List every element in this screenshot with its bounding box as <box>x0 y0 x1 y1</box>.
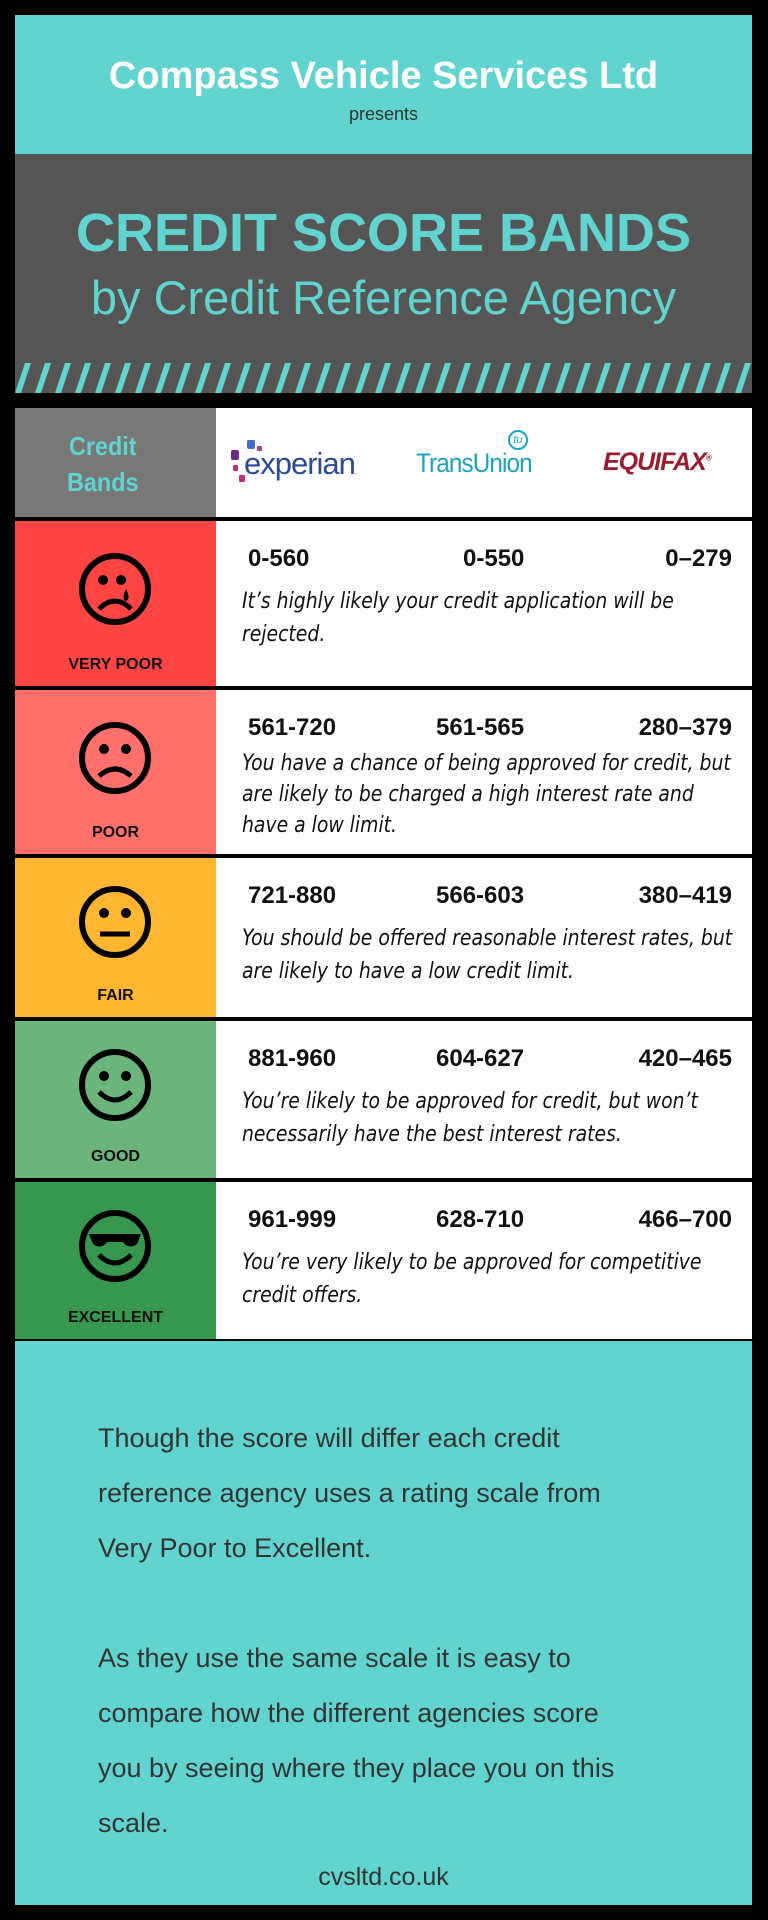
row: very poor: 0-550 <box>463 545 524 572</box>
logo: experian: experian. <box>244 446 356 481</box>
row: excellent: 466–700 <box>639 1206 732 1233</box>
row: good: 420–465 <box>639 1045 732 1072</box>
row: excellent <box>15 1182 752 1339</box>
table header row <box>15 408 752 517</box>
row: good: 604-627 <box>436 1045 524 1072</box>
summary text: As they use the same scale it is easy to compare how the different agencies score you by seeing where they place you on this scale. <box>98 1643 614 1838</box>
title panel: by Credit Reference Agency <box>91 271 676 324</box>
icon: crying face <box>79 553 151 625</box>
bottom panel: summary <box>15 1341 752 1905</box>
row: fair: 566-603 <box>436 882 524 909</box>
row: poor: POOR <box>92 824 139 841</box>
logo: transunion <box>416 430 532 478</box>
row: poor: 280–379 <box>639 714 732 741</box>
icon: sad face <box>79 722 151 794</box>
row: excellent: 628-710 <box>436 1206 524 1233</box>
row: poor <box>15 690 752 854</box>
logo: equifax: EQUIFAX® <box>603 448 711 476</box>
row: good: GOOD <box>91 1148 140 1165</box>
row: fair <box>15 858 752 1017</box>
icon: smiling face <box>79 1049 151 1121</box>
row: very poor <box>15 521 752 686</box>
header: company: presents <box>349 104 418 124</box>
row: poor: 561-565 <box>436 714 524 741</box>
heading: credit bands <box>67 431 139 497</box>
row: poor: 561-720 <box>248 714 336 741</box>
row: fair: 721-880 <box>248 882 336 909</box>
row: excellent: EXCELLENT <box>68 1309 163 1326</box>
row: good: You’re likely to be approved for credit, but won’t necessarily have the best interest rates. <box>242 1089 698 1147</box>
header: company: Compass Vehicle Services Ltd <box>109 55 658 97</box>
footer url: cvsltd.co.uk <box>318 1863 449 1891</box>
row: fair: You should be offered reasonable interest rates, but are likely to have a low credit limit. <box>242 926 732 984</box>
heading: credit bands: Bands <box>67 467 139 497</box>
title panel: CREDIT SCORE BANDS <box>76 203 691 263</box>
row: excellent: 961-999 <box>248 1206 336 1233</box>
row: poor: You have a chance of being approved for credit, but are likely to be charged a high interest rate and have a low limit. <box>242 751 731 838</box>
summary text: Though the score will differ each credit reference agency uses a rating scale from Very Poor to Excellent. <box>98 1423 601 1563</box>
row: excellent: You’re very likely to be approved for competitive credit offers. <box>242 1250 702 1308</box>
row: fair: FAIR <box>97 987 134 1004</box>
heading: credit bands: Credit <box>69 431 137 461</box>
row: very poor: VERY POOR <box>68 656 163 673</box>
icon: sunglasses face <box>79 1210 151 1282</box>
row: very poor: 0–279 <box>665 545 732 572</box>
row: good: 881-960 <box>248 1045 336 1072</box>
row: fair: 380–419 <box>639 882 732 909</box>
header: company <box>15 15 752 154</box>
logo: transunion: tu <box>513 434 523 446</box>
row: good <box>15 1021 752 1178</box>
row: very poor: It’s highly likely your credit application will be rejected. <box>242 589 674 647</box>
row: very poor: 0-560 <box>248 545 309 572</box>
title panel <box>15 154 752 393</box>
icon: neutral face <box>79 886 151 958</box>
summary text <box>98 1423 614 1838</box>
logo: transunion: TransUnion <box>416 448 532 478</box>
